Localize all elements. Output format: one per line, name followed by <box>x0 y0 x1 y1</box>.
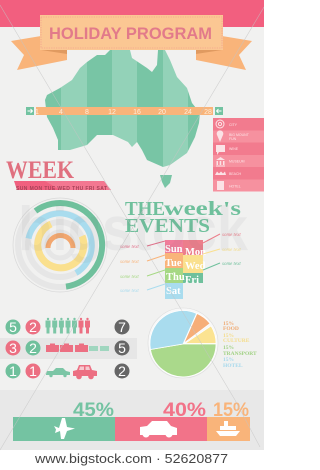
pie legend: 15% <box>223 321 234 327</box>
pie legend: FOOD <box>223 326 239 332</box>
yellow arc <box>38 224 84 268</box>
legend labels: MUSEUM <box>229 160 245 164</box>
icon: city <box>216 120 224 128</box>
icon: red car <box>73 365 97 379</box>
timeline bar <box>26 107 223 116</box>
share: car <box>115 400 207 441</box>
blue arc <box>28 213 92 273</box>
pie legend: HOTEL <box>223 363 243 369</box>
day grid <box>165 240 206 299</box>
legend labels: BEACH <box>229 172 242 176</box>
icon: ship <box>216 421 240 436</box>
legend labels: FUN <box>229 137 237 141</box>
callout labels: some text <box>120 289 139 294</box>
timeline day numbers: 1 <box>35 109 39 116</box>
icon: arrival plane <box>215 107 223 115</box>
pie legend: CULTURE <box>223 338 250 344</box>
timeline day numbers: 24 <box>184 109 192 116</box>
day names: Fri <box>185 275 199 286</box>
pie legend: 15% <box>223 333 234 339</box>
day names: Sun <box>165 244 183 255</box>
callout labels: some text <box>120 245 139 250</box>
outer ring track <box>18 203 102 287</box>
legend panel <box>213 118 264 192</box>
timeline day numbers: 8 <box>85 109 89 116</box>
icon: hotel <box>217 181 224 190</box>
callout labels: some text <box>120 275 139 280</box>
slice: food <box>184 314 210 343</box>
WEEK heading: WEEK <box>6 157 74 184</box>
events heading: week's <box>164 198 241 220</box>
ribbon title banner <box>11 15 252 70</box>
slice: hotel <box>150 311 196 350</box>
timeline day numbers: 28 <box>204 109 212 116</box>
icon: plane <box>54 418 75 439</box>
header band <box>0 0 264 27</box>
slice: culture <box>185 326 216 344</box>
row: luggage: 3 <box>9 340 17 356</box>
transport share bar <box>13 400 250 441</box>
stock watermark lines <box>0 5 264 450</box>
icon: people <box>46 318 90 334</box>
icon: car <box>140 421 177 438</box>
day names: Mon <box>185 247 206 258</box>
events heading <box>125 198 241 237</box>
timeline day numbers: 16 <box>133 109 141 116</box>
day names: Tue <box>165 258 182 269</box>
week day bar <box>14 181 111 192</box>
row: cars: 1 <box>9 363 17 379</box>
legend labels: CITY <box>229 123 238 127</box>
day names: Wed <box>185 261 206 272</box>
share: ship <box>207 400 250 441</box>
orange arc <box>48 235 73 248</box>
pie legend: 15% <box>223 357 234 363</box>
callout labels: some text <box>222 262 241 267</box>
legend labels: BIG MOUNT <box>229 133 250 137</box>
icon: beach <box>215 172 226 175</box>
radial chart <box>13 198 107 292</box>
callout labels: some text <box>222 248 241 253</box>
day names: Thu <box>166 272 185 283</box>
event callouts <box>120 233 241 294</box>
timeline day numbers <box>35 109 212 116</box>
timeline day numbers: 12 <box>108 109 116 116</box>
green arc <box>36 203 102 287</box>
icon: departure plane <box>26 107 34 115</box>
row: people: 2 <box>29 319 37 335</box>
source footer: www.bigstock.com · 52620877 <box>34 451 228 466</box>
share: plane <box>13 400 115 441</box>
pie chart <box>148 308 218 378</box>
callout labels: some text <box>222 233 241 238</box>
day names <box>165 244 206 297</box>
share: car: 40% <box>163 400 206 421</box>
slice: transport <box>150 344 216 377</box>
row: cars <box>6 363 130 379</box>
week day labels: SUN MON TUE WED THU FRI SAT <box>16 186 107 192</box>
pie legend: 15% <box>223 345 234 351</box>
ribbon left tail <box>11 36 67 70</box>
icon: suitcases <box>46 344 109 352</box>
icon: speech bubble <box>216 145 225 155</box>
timeline day numbers: 20 <box>158 109 166 116</box>
row: luggage: 2 <box>29 340 37 356</box>
ribbon right tail <box>196 36 252 70</box>
row: people <box>6 318 130 335</box>
legend labels: WINE <box>229 147 239 151</box>
title: HOLIDAY PROGRAM <box>49 24 212 43</box>
share: plane: 45% <box>73 400 114 421</box>
icon: Tasmania <box>160 175 172 188</box>
pie legend <box>223 321 257 369</box>
events heading: THE <box>125 198 165 220</box>
map of Australia <box>40 45 203 188</box>
icon: green car <box>46 368 70 377</box>
day names: Sat <box>166 286 181 297</box>
icon: pin <box>217 130 223 142</box>
callout labels: some text <box>120 260 139 265</box>
row: people: 5 <box>9 319 17 335</box>
traveller stats table <box>0 318 137 379</box>
legend labels <box>229 123 250 188</box>
share: ship: 15% <box>213 400 249 421</box>
callout labels <box>120 233 241 294</box>
icon: museum <box>216 157 225 166</box>
row: luggage: 5 <box>118 340 126 356</box>
row: luggage <box>6 340 130 356</box>
timeline day numbers: 4 <box>59 109 63 116</box>
events heading: EVENTS <box>125 215 210 237</box>
row: cars: 1 <box>29 363 37 379</box>
row: cars: 2 <box>118 363 126 379</box>
row: people: 7 <box>118 319 126 335</box>
pie legend: TRANSPORT <box>223 351 257 357</box>
legend labels: HOTEL <box>229 184 241 188</box>
